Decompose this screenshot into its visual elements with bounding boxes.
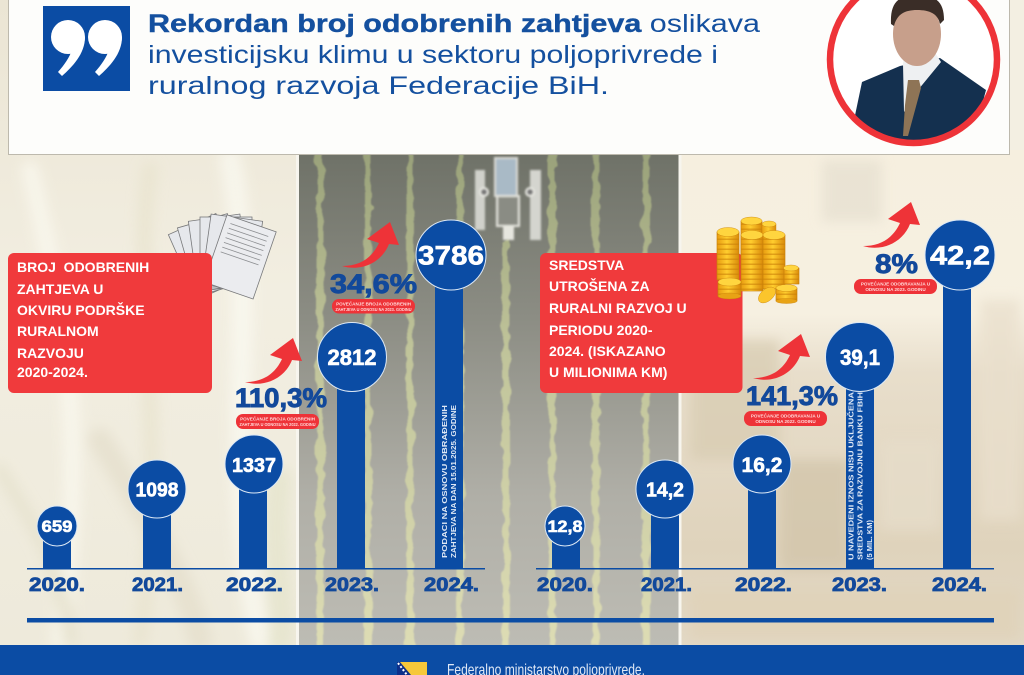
bar 2021: 14,2: 14,2 <box>646 480 684 502</box>
left callout: broj odobrenih zahtjeva: BROJ ODOBRENIH <box>17 259 149 275</box>
quote text: Rekordan broj odobrenih zahtjeva oslikava <box>148 10 760 38</box>
bar 2024: 42,2: 42,2 <box>930 240 990 270</box>
bar 2020: 12,8 <box>545 506 585 569</box>
growth callout: 34,6%: 34,6% <box>330 269 417 299</box>
portrait <box>825 0 1005 150</box>
header panel <box>8 0 1010 154</box>
left year labels: 2021. <box>132 575 183 596</box>
quote text: investicijsku klimu u sektoru poljoprivrede i <box>148 41 718 69</box>
quote text: ruralnog razvoja Federacije BiH. <box>148 72 609 100</box>
right year labels: 2020. <box>537 575 593 596</box>
quote text <box>148 10 760 100</box>
growth callout: 34,6%: ZAHTJEVA U ODNOSU NA 2023. GODINU <box>336 307 412 312</box>
bar 2022: 16,2: 16,2 <box>742 454 782 477</box>
left chart axis <box>27 568 485 570</box>
bar 2022: 16,2 <box>733 435 791 569</box>
right chart bars <box>545 220 995 569</box>
right callout: sredstva za ruralni razvoj: UTROŠENA ZA <box>549 277 650 294</box>
right callout: sredstva za ruralni razvoj: RURALNI RAZVOJ U <box>549 300 687 316</box>
left year labels: 2024. <box>424 575 479 596</box>
right callout: sredstva za ruralni razvoj: SREDSTVA <box>549 257 624 273</box>
growth callout: 141,3% <box>744 334 838 426</box>
growth callout: 34,6% <box>330 222 417 314</box>
left year labels: 2023. <box>325 575 379 596</box>
left callout: broj odobrenih zahtjeva: RAZVOJU <box>17 345 84 361</box>
right callout: sredstva za ruralni razvoj <box>540 253 742 393</box>
right chart axis <box>536 568 994 570</box>
arrow <box>753 334 810 380</box>
growth callout: 8%: POVEĆANJE ODOBRAVANJA U <box>861 280 931 286</box>
left callout: broj odobrenih zahtjeva: ZAHTJEVA U <box>17 281 103 297</box>
bar 2020: 659 <box>37 506 77 569</box>
right callout: sredstva za ruralni razvoj: U MILIONIMA KM) <box>549 364 667 380</box>
left callout: broj odobrenih zahtjeva <box>8 253 212 393</box>
left callout: broj odobrenih zahtjeva: OKVIRU PODRŠKE <box>17 301 145 318</box>
bar 2024: 3786 <box>416 220 486 569</box>
note inside bar 2023: (5 MIL. KM) <box>865 520 874 560</box>
bar 2020: 12,8: 12,8 <box>548 517 582 536</box>
growth callout: 141,3%: 141,3% <box>746 381 838 411</box>
bar 2022: 1337 <box>225 435 283 569</box>
bar 2021: 1098: 1098 <box>136 480 178 502</box>
icon: document stack <box>168 214 276 300</box>
icon: quotation mark <box>43 6 130 91</box>
tractor in field <box>475 158 541 240</box>
left callout: broj odobrenih zahtjeva: RURALNOM <box>17 323 99 339</box>
right callout: sredstva za ruralni razvoj: 2024. (ISKAZANO <box>549 343 666 359</box>
left callout: broj odobrenih zahtjeva: 2020-2024. <box>17 364 88 380</box>
left year labels: 2022. <box>226 575 283 596</box>
footer band <box>0 645 1024 675</box>
growth callout: 8%: ODNOSU NA 2023. GODINU <box>865 287 926 292</box>
bar 2022: 1337: 1337 <box>232 455 276 477</box>
bar 2024: 42,2 <box>925 220 995 569</box>
growth callout: 110,3%: POVEĆANJE BROJA ODOBRENIH <box>240 414 316 422</box>
growth callout: 141,3%: ODNOSU NA 2022. GODINU <box>755 419 816 424</box>
note inside bar 2023: SREDSTVA ZA RAZVOJNU BANKU FBIH <box>856 392 864 560</box>
note inside bar 2024: ZAHTJEVA NA DAN 15.01.2025. GODINE <box>449 405 458 558</box>
growth callout: 110,3%: 110,3% <box>235 383 327 413</box>
left chart bars <box>37 220 486 569</box>
growth callout: 8%: 8% <box>875 249 918 279</box>
right year labels <box>537 575 987 596</box>
bar 2024: 3786: 3786 <box>418 240 484 270</box>
bar 2023: 2812 <box>318 322 386 569</box>
right year labels: 2024. <box>932 575 987 596</box>
growth callout: 110,3%: ZAHTJEVA U ODNOSU NA 2022. GODINU <box>240 422 316 427</box>
bar 2020: 659: 659 <box>42 517 72 536</box>
icon: Bosnia and Herzegovina flag <box>397 662 427 675</box>
note inside bar 2023: U NAVEDENI IZNOS NISU UKLJUČENA <box>846 391 856 560</box>
right year labels: 2022. <box>735 575 792 596</box>
divider line <box>27 618 994 622</box>
right year labels: 2021. <box>641 575 692 596</box>
growth callout: 34,6%: POVEĆANJE BROJA ODOBRENIH <box>336 300 412 306</box>
bar 2023: 39,1: 39,1 <box>840 345 880 370</box>
icon: gold coin stacks <box>717 217 799 306</box>
growth callout: 110,3% <box>235 338 327 429</box>
left year labels <box>29 575 479 596</box>
arrow <box>245 338 302 384</box>
arrow <box>863 202 920 248</box>
right year labels: 2023. <box>832 575 887 596</box>
bar 2023: 39,1 <box>826 322 894 569</box>
bar 2023: 2812: 2812 <box>328 345 376 370</box>
growth callout: 8% <box>854 202 937 294</box>
arrow <box>342 222 399 268</box>
left year labels: 2020. <box>29 575 85 596</box>
bar 2021: 14,2 <box>636 460 694 569</box>
bar 2021: 1098 <box>128 460 186 569</box>
note inside bar 2024: PODACI NA OSNOVU OBRAĐENIH <box>440 405 449 558</box>
right callout: sredstva za ruralni razvoj: PERIODU 2020- <box>549 322 653 338</box>
growth callout: 141,3%: POVEĆANJE ODOBRAVANJA U <box>751 412 821 418</box>
note inside bar 2024 <box>440 405 458 558</box>
note inside bar 2023 <box>846 391 874 560</box>
